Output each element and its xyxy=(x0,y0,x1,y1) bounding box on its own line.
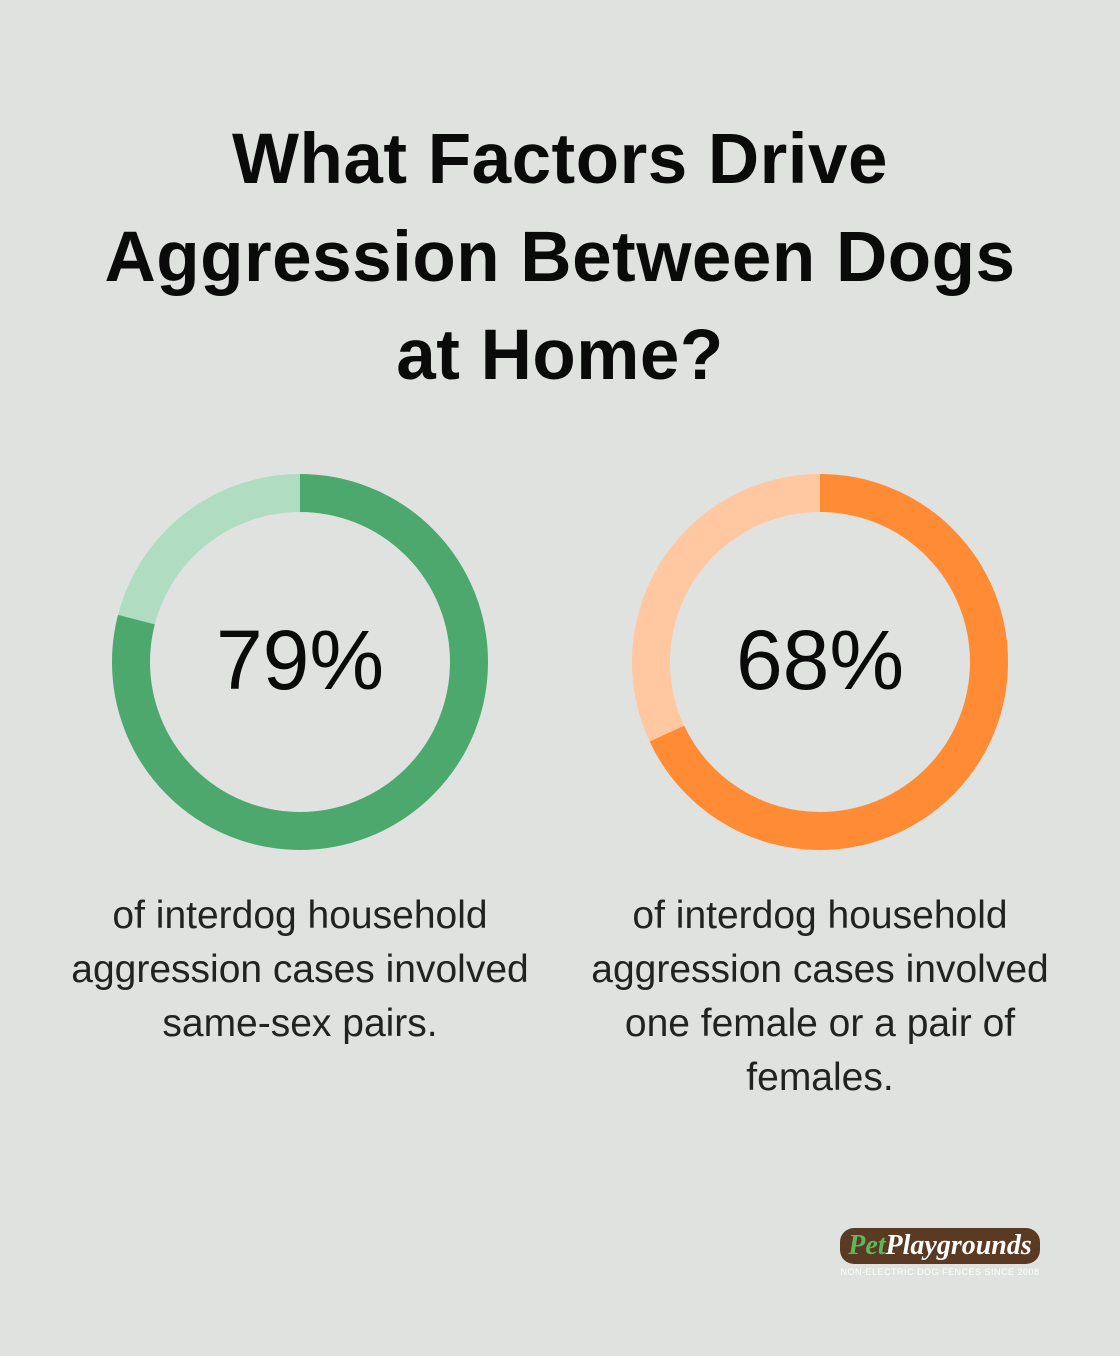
percentage 68: 68% xyxy=(736,613,904,707)
logo xyxy=(840,1228,1040,1277)
description left: of interdog household aggression cases involved same-sex pairs. xyxy=(71,894,529,1045)
description right: of interdog household aggression cases involved one female or a pair of females. xyxy=(591,894,1049,1099)
donut chart: 68% xyxy=(632,474,1008,850)
title: at Home? xyxy=(396,316,724,395)
title: What Factors Drive xyxy=(232,120,888,199)
percentage 79: 79% xyxy=(216,613,384,707)
title: Aggression Between Dogs xyxy=(104,218,1016,297)
logo: PetPlaygrounds xyxy=(848,1230,1032,1261)
title xyxy=(104,120,1016,395)
logo: NON-ELECTRIC DOG FENCES SINCE 2008 xyxy=(840,1267,1040,1277)
donut chart: 79% xyxy=(112,474,488,850)
